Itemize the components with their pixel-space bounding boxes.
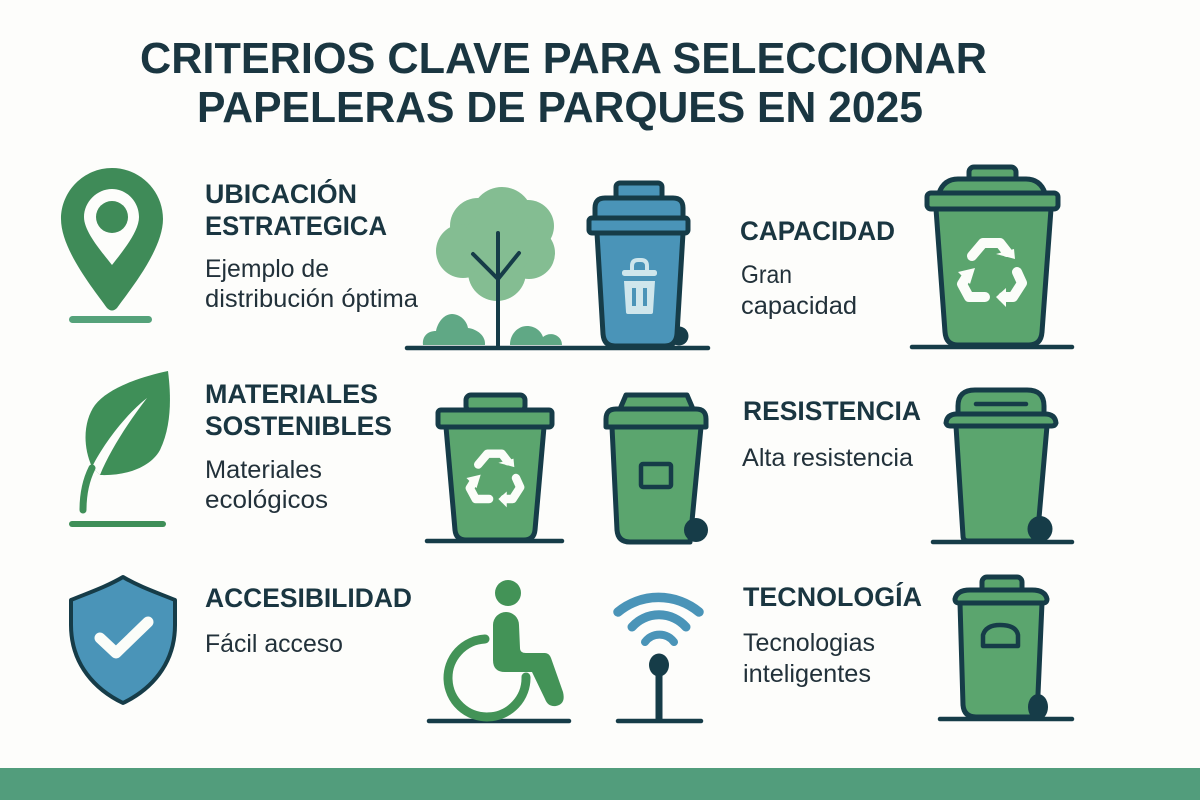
text: ubicación estratégica: UBICACIÓN bbox=[205, 179, 357, 209]
text: materiales sostenibles: MATERIALES bbox=[205, 379, 378, 409]
icon: wifi antenna bbox=[618, 597, 701, 721]
footer bar bbox=[0, 768, 1200, 800]
title bbox=[140, 34, 987, 132]
text: materiales sostenibles: Materiales bbox=[205, 456, 322, 484]
text: capacidad: CAPACIDAD bbox=[740, 216, 895, 246]
text: capacidad: capacidad bbox=[741, 292, 857, 320]
illustration: recycling bin bbox=[427, 395, 562, 541]
text: ubicación estratégica: ESTRATEGICA bbox=[205, 211, 387, 241]
text: materiales sostenibles: SOSTENIBLES bbox=[205, 411, 392, 441]
icon: location pin bbox=[61, 168, 163, 323]
text: ubicación estratégica: distribución óptima bbox=[205, 285, 418, 313]
illustration: bin with slot lid bbox=[933, 390, 1072, 542]
text: resistencia: RESISTENCIA bbox=[743, 396, 921, 426]
text: tecnología: TECNOLOGÍA bbox=[743, 582, 922, 612]
text: accesibilidad: Fácil acceso bbox=[205, 630, 343, 658]
icon: shield with check bbox=[71, 577, 175, 703]
illustration: bin with handle bbox=[940, 577, 1072, 720]
illustration: wheeled bin with label bbox=[606, 395, 708, 542]
text: accesibilidad bbox=[205, 583, 412, 658]
title: PAPELERAS DE PARQUES EN 2025 bbox=[197, 83, 923, 132]
text: tecnología: Tecnologias bbox=[743, 629, 875, 657]
illustration: large bin with recycling symbol bbox=[912, 167, 1072, 347]
text: capacidad bbox=[740, 216, 895, 320]
title: CRITERIOS CLAVE PARA SELECCIONAR bbox=[140, 34, 987, 83]
text: ubicación estratégica: Ejemplo de bbox=[205, 255, 329, 283]
text: materiales sostenibles bbox=[205, 379, 392, 514]
illustration: blue bin bbox=[407, 183, 708, 348]
icon: recycling arrows bbox=[958, 243, 1022, 307]
text: resistencia bbox=[742, 396, 921, 472]
text: ubicación estratégica bbox=[205, 179, 418, 313]
text: resistencia: Alta resistencia bbox=[742, 444, 913, 472]
illustration: tree and bushes bbox=[423, 187, 562, 346]
icon: recycling arrows small bbox=[466, 454, 520, 507]
text: tecnología: inteligentes bbox=[743, 660, 871, 688]
text: accesibilidad: ACCESIBILIDAD bbox=[205, 583, 412, 613]
text: capacidad: Gran bbox=[741, 261, 792, 289]
icon: leaf bbox=[69, 371, 170, 527]
text: materiales sostenibles: ecológicos bbox=[205, 486, 328, 514]
icon: wheelchair user bbox=[429, 580, 569, 721]
text: tecnología bbox=[743, 582, 922, 688]
